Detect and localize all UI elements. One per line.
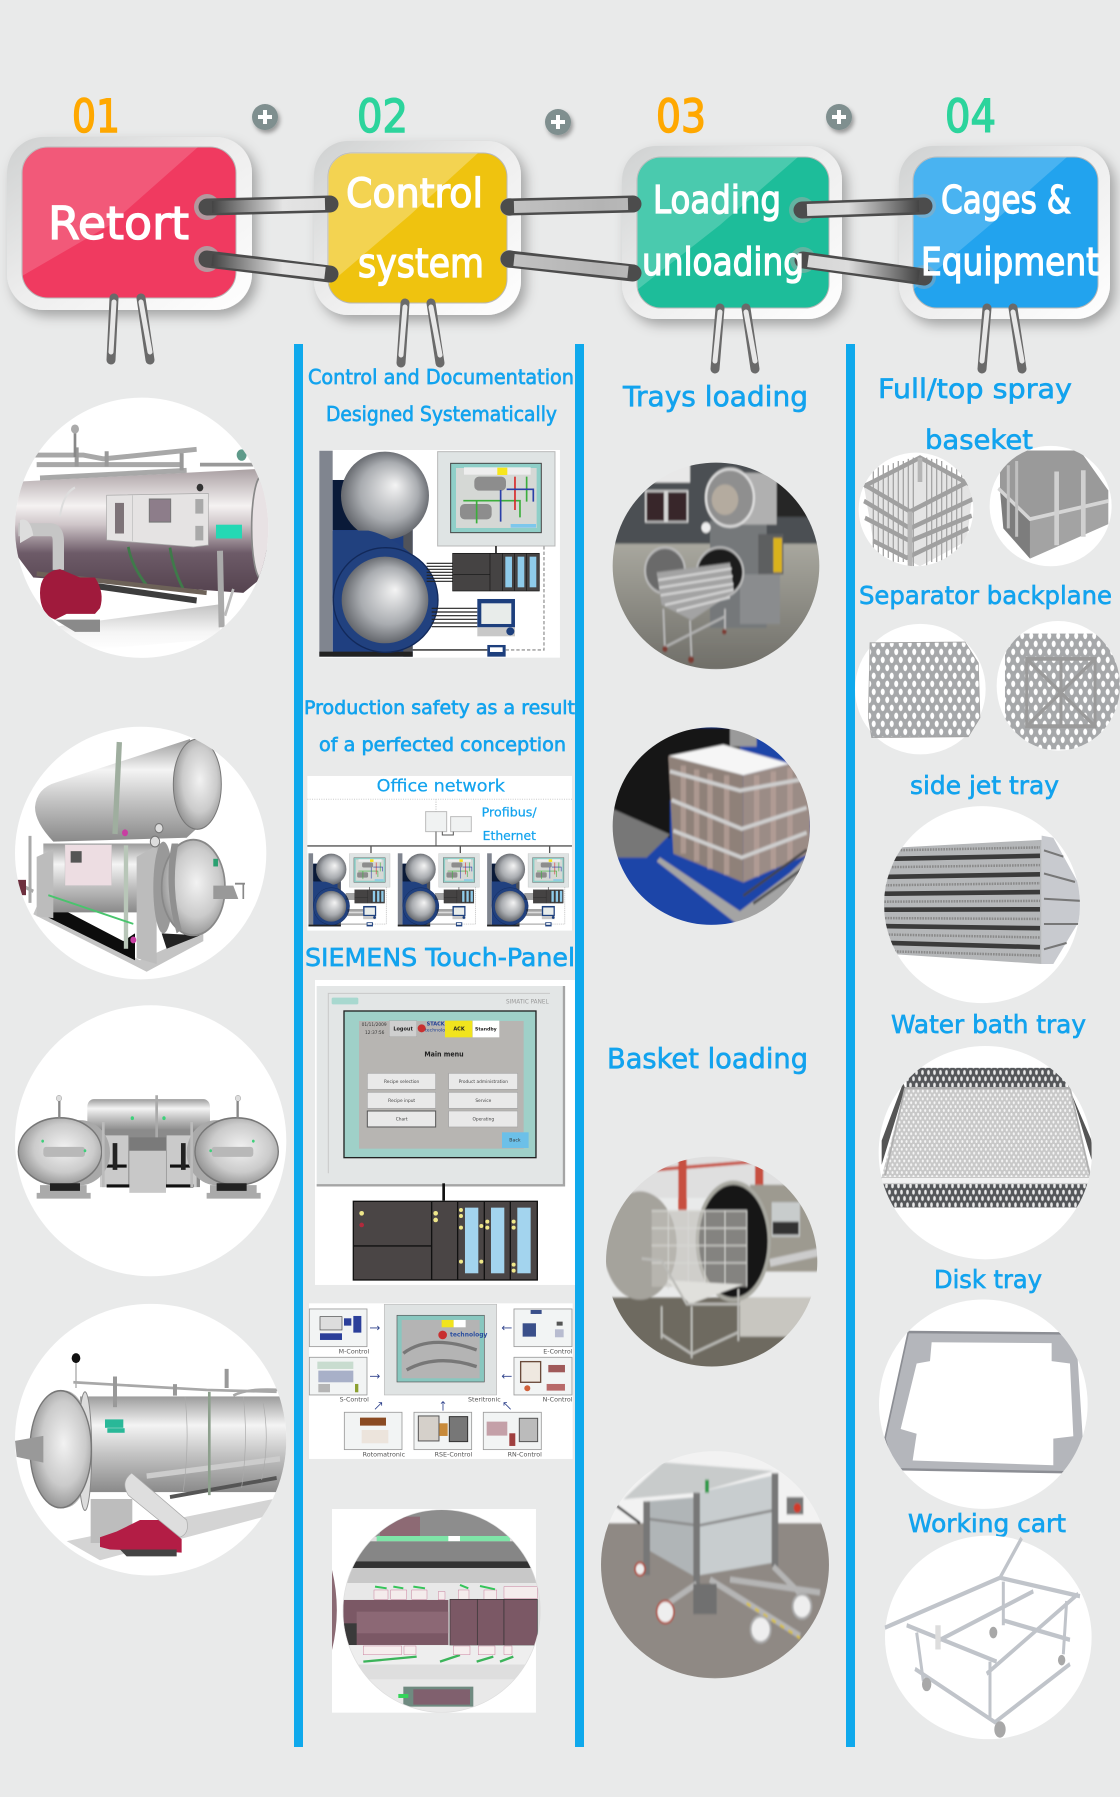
step number 04: 04 (945, 90, 996, 143)
heading: Basket loading: Basket loading (607, 1042, 808, 1075)
photo: disk tray frame (879, 1300, 1088, 1509)
diagram: control variants: N-Control (543, 1397, 573, 1404)
heading: Control and Documentation: Control and Documentation (308, 365, 574, 389)
diagram: touch panel with PLC: Recipe selection (384, 1079, 420, 1085)
diagram: retort control layout (319, 450, 560, 658)
photo: trays loading into retort (610, 460, 823, 670)
heading: SIEMENS Touch-Panel: SIEMENS Touch-Panel (305, 943, 575, 972)
photo: basket lid box (990, 446, 1112, 566)
photo: spray basket (859, 453, 973, 566)
diagram: touch panel with PLC: Service (475, 1098, 492, 1104)
icon: plus badge 2 (545, 109, 571, 135)
column divider: middle (575, 344, 584, 1747)
photo: basket cart (600, 1449, 833, 1679)
diagram: touch panel with PLC: Logout (393, 1027, 413, 1033)
heading: Trays loading: Trays loading (622, 380, 808, 413)
diagram: control variants: technology (450, 1332, 488, 1339)
diagram: touch panel with PLC: 01/11/2009 (362, 1022, 387, 1028)
icon: plus badge 1 (252, 104, 278, 130)
diagram: control variants: E-Control (543, 1348, 573, 1355)
heading: baseket: baseket (925, 425, 1033, 456)
diagram: touch panel with PLC: Product administration (459, 1079, 508, 1085)
column divider: right (846, 344, 855, 1747)
diagram: office network: Office network (377, 777, 505, 796)
photo: water bath tray (879, 1046, 1092, 1259)
card title: Cages &: Cages & (941, 178, 1071, 222)
diagram: office network: Profibus/ (482, 806, 538, 820)
diagram: touch panel with PLC: Recipe input (388, 1098, 415, 1104)
heading: Designed Systematically: Designed Systematically (326, 402, 557, 426)
photo: separator plate with cross frame (997, 621, 1120, 751)
photo: side jet tray (883, 806, 1080, 1003)
photo: PLC cabinet (332, 1509, 541, 1713)
card: Control system (314, 141, 521, 315)
card: Retort (7, 137, 252, 310)
diagram: control variants: RN-Control (508, 1452, 542, 1459)
diagram: touch panel with PLC: Back (509, 1138, 521, 1144)
heading: side jet tray: side jet tray (910, 771, 1059, 800)
photo: double vessel retort (15, 727, 266, 979)
diagram: touch panel with PLC: Main menu (424, 1050, 464, 1059)
diagram: control variants (309, 1303, 573, 1459)
step number 03: 03 (656, 90, 706, 143)
heading: Disk tray: Disk tray (934, 1265, 1042, 1294)
card title: system: system (358, 241, 484, 287)
diagram: touch panel with PLC: SIMATIC PANEL (506, 998, 549, 1005)
diagram: control variants: M-Control (339, 1348, 370, 1355)
diagram: control variants: S-Control (340, 1397, 369, 1404)
diagram: office network (307, 776, 572, 931)
diagram: control variants: Rotomatronic (363, 1452, 406, 1459)
heading: Full/top spray: Full/top spray (878, 374, 1072, 405)
diagram: touch panel with PLC: 12:37:56 (365, 1030, 385, 1036)
photo: retort with pump (13, 398, 272, 658)
ring connectors between cards (111, 194, 1022, 369)
photo: separator plate (855, 624, 986, 754)
heading: Production safety: Production safety as a result (304, 697, 575, 719)
card: Cages and Equipment (899, 146, 1110, 319)
diagram: touch panel with PLC: STACK (427, 1021, 446, 1027)
diagram: touch panel with PLC: Standby (475, 1027, 497, 1033)
photo: basket loading into retort (603, 1154, 820, 1371)
photo: tray stack on rail (610, 724, 817, 926)
step number 02: 02 (357, 90, 408, 143)
heading: Working cart: Working cart (908, 1509, 1066, 1538)
card title: unloading: unloading (642, 240, 804, 284)
card title: Retort: Retort (48, 197, 189, 250)
diagram: touch panel with PLC: ACK (453, 1027, 466, 1033)
diagram: touch panel with PLC: technology (425, 1027, 451, 1033)
diagram: control variants: RSE-Control (435, 1452, 472, 1459)
photo: twin retort front view (15, 1005, 286, 1276)
diagram: touch panel with PLC: Chart (396, 1116, 408, 1122)
card title: Control: Control (346, 171, 483, 217)
heading: Water bath tray: Water bath tray (891, 1010, 1086, 1039)
diagram: office network: Ethernet (483, 829, 536, 843)
photo: retort side view with red motor (15, 1304, 287, 1576)
step number 01: 01 (72, 90, 120, 143)
diagram: control variants: Steritronic (468, 1397, 501, 1404)
column divider: left (294, 344, 303, 1747)
diagram: touch panel with PLC (315, 980, 575, 1285)
heading: Separator backplane: Separator backplane (859, 581, 1112, 610)
card: Loading unloading (622, 146, 842, 319)
diagram: touch panel with PLC: Operating (472, 1116, 494, 1122)
icon: plus badge 3 (826, 104, 852, 130)
card title: Loading: Loading (653, 178, 781, 222)
photo: working cart (885, 1536, 1092, 1739)
heading: perfected conception: of a perfected conception (319, 734, 566, 756)
